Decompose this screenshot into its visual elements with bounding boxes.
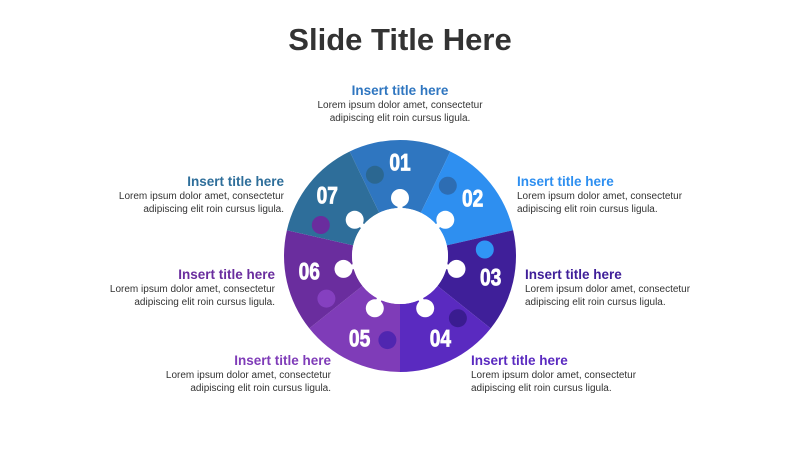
text block: 02: adipiscing elit roin cursus ligula. xyxy=(517,204,658,215)
text block: 05: Lorem ipsum dolor amet, consectetur xyxy=(166,370,331,381)
text block: 04: Lorem ipsum dolor amet, consectetur xyxy=(471,370,636,381)
text block: 04: Insert title here xyxy=(471,353,568,368)
segment 06 xyxy=(284,230,362,328)
text block: 07: adipiscing elit roin cursus ligula. xyxy=(143,204,284,215)
segment 07 xyxy=(287,151,379,245)
segment numbers xyxy=(299,148,501,352)
text block: 03: adipiscing elit roin cursus ligula. xyxy=(525,297,666,308)
puzzle tabs xyxy=(312,166,494,349)
text block: 03: Insert title here xyxy=(525,267,622,282)
segment 03 xyxy=(438,230,516,328)
segment numbers: 07 xyxy=(317,181,338,209)
segment numbers: 03 xyxy=(480,263,501,291)
text block: 04: adipiscing elit roin cursus ligula. xyxy=(471,383,612,394)
text block: 01: adipiscing elit roin cursus ligula. xyxy=(330,113,470,124)
text block: 05: adipiscing elit roin cursus ligula. xyxy=(190,383,331,394)
text block: 01: Insert title here xyxy=(352,83,448,98)
segment 02 xyxy=(421,151,513,245)
text block: 03: Lorem ipsum dolor amet, consectetur xyxy=(525,284,690,295)
text block: 07 xyxy=(119,174,284,215)
text block: 05: Insert title here xyxy=(234,353,331,368)
segment 04 xyxy=(400,286,491,372)
title: Slide Title Here xyxy=(288,22,512,57)
segment 01 xyxy=(350,140,450,213)
text block: 02: Lorem ipsum dolor amet, consectetur xyxy=(517,191,682,202)
text block: 06 xyxy=(110,267,275,308)
text block: 06: Lorem ipsum dolor amet, consectetur xyxy=(110,284,275,295)
text block: 06: Insert title here xyxy=(178,267,275,282)
text block: 05 xyxy=(166,353,331,394)
text block: 01: Lorem ipsum dolor amet, consectetur xyxy=(317,100,483,111)
text block: 02 xyxy=(517,174,682,215)
text block: 03 xyxy=(525,267,690,308)
text block: 07: Insert title here xyxy=(187,174,284,189)
text block: 07: Lorem ipsum dolor amet, consectetur xyxy=(119,191,284,202)
segment numbers: 01 xyxy=(389,148,411,176)
segment 05 xyxy=(309,286,400,372)
segment numbers: 06 xyxy=(299,257,320,285)
text block: 06: adipiscing elit roin cursus ligula. xyxy=(134,297,275,308)
segment numbers: 05 xyxy=(349,324,370,352)
text block: 04 xyxy=(471,353,636,394)
text block: 02: Insert title here xyxy=(517,174,614,189)
text block: 01 xyxy=(317,83,483,124)
segment numbers: 04 xyxy=(430,324,451,352)
segment numbers: 02 xyxy=(462,184,483,212)
inner knobs xyxy=(334,189,466,317)
